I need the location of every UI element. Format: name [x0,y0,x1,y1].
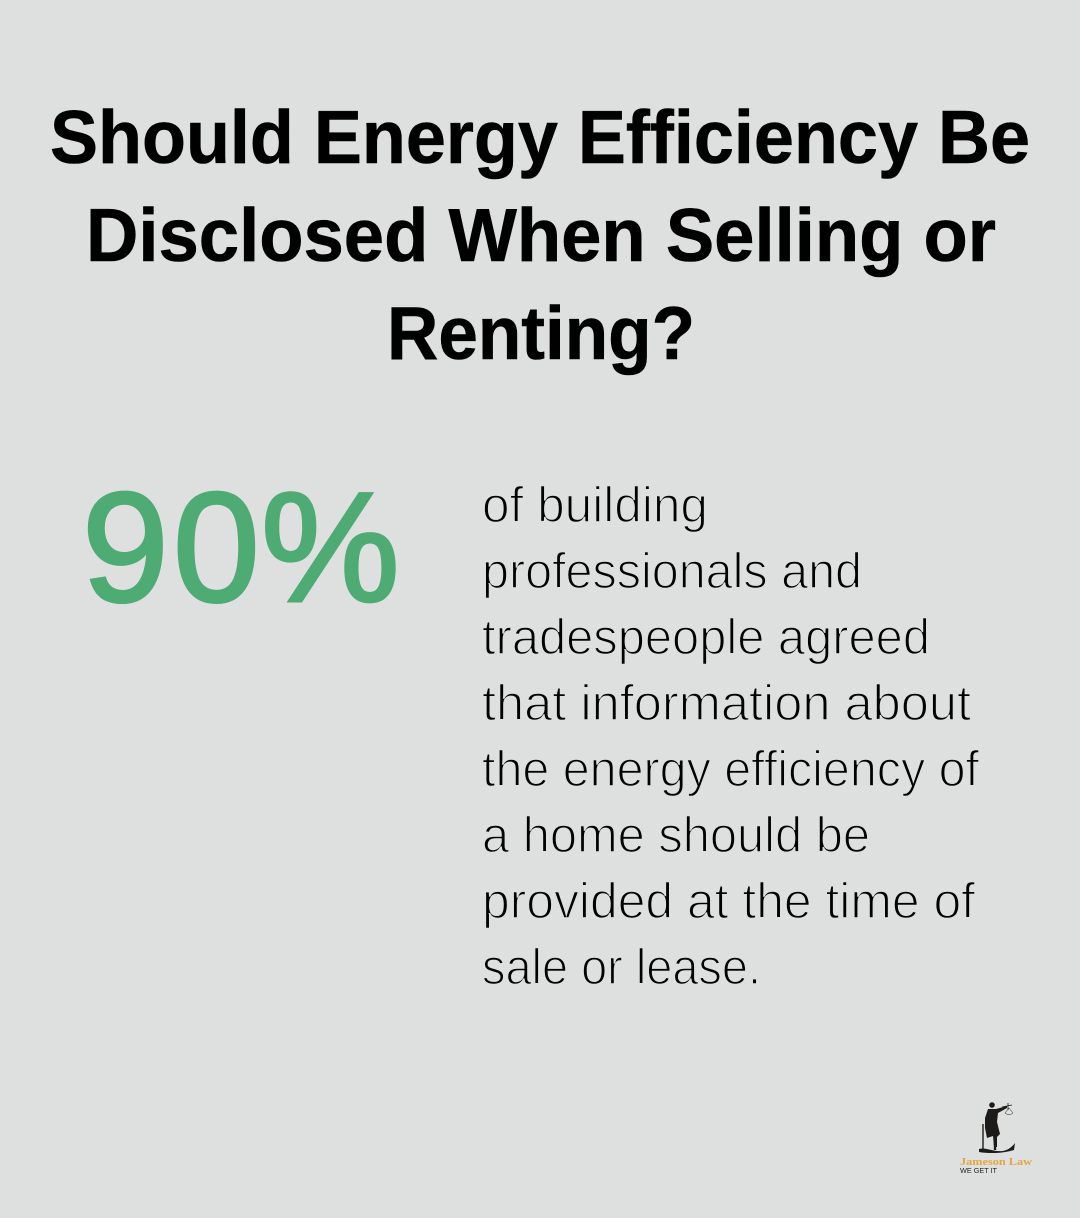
statistic description text: a home should be [482,807,870,863]
logo: Jameson Law [960,1102,1032,1175]
big statistic: 90%: 90% [82,461,400,635]
icon: lady justice figure [979,1102,1015,1153]
logo tagline: WE GET IT [960,1166,997,1175]
statistic description text: the energy efficiency of [482,741,979,797]
statistic description text: that information about [482,675,971,731]
statistic description text: provided at the time of [482,873,975,929]
statistic description text: professionals and [482,543,862,599]
title: Renting? [387,291,695,375]
statistic description text: of building [482,477,708,533]
logo wordmark: Jameson Law [960,1156,1032,1168]
statistic description text: sale or lease. [482,939,761,995]
statistic description text: tradespeople agreed [482,609,930,665]
title: Disclosed When Selling or [86,193,996,277]
title [50,95,1030,375]
statistic description text [482,477,979,995]
title: Should Energy Efficiency Be [50,95,1030,179]
